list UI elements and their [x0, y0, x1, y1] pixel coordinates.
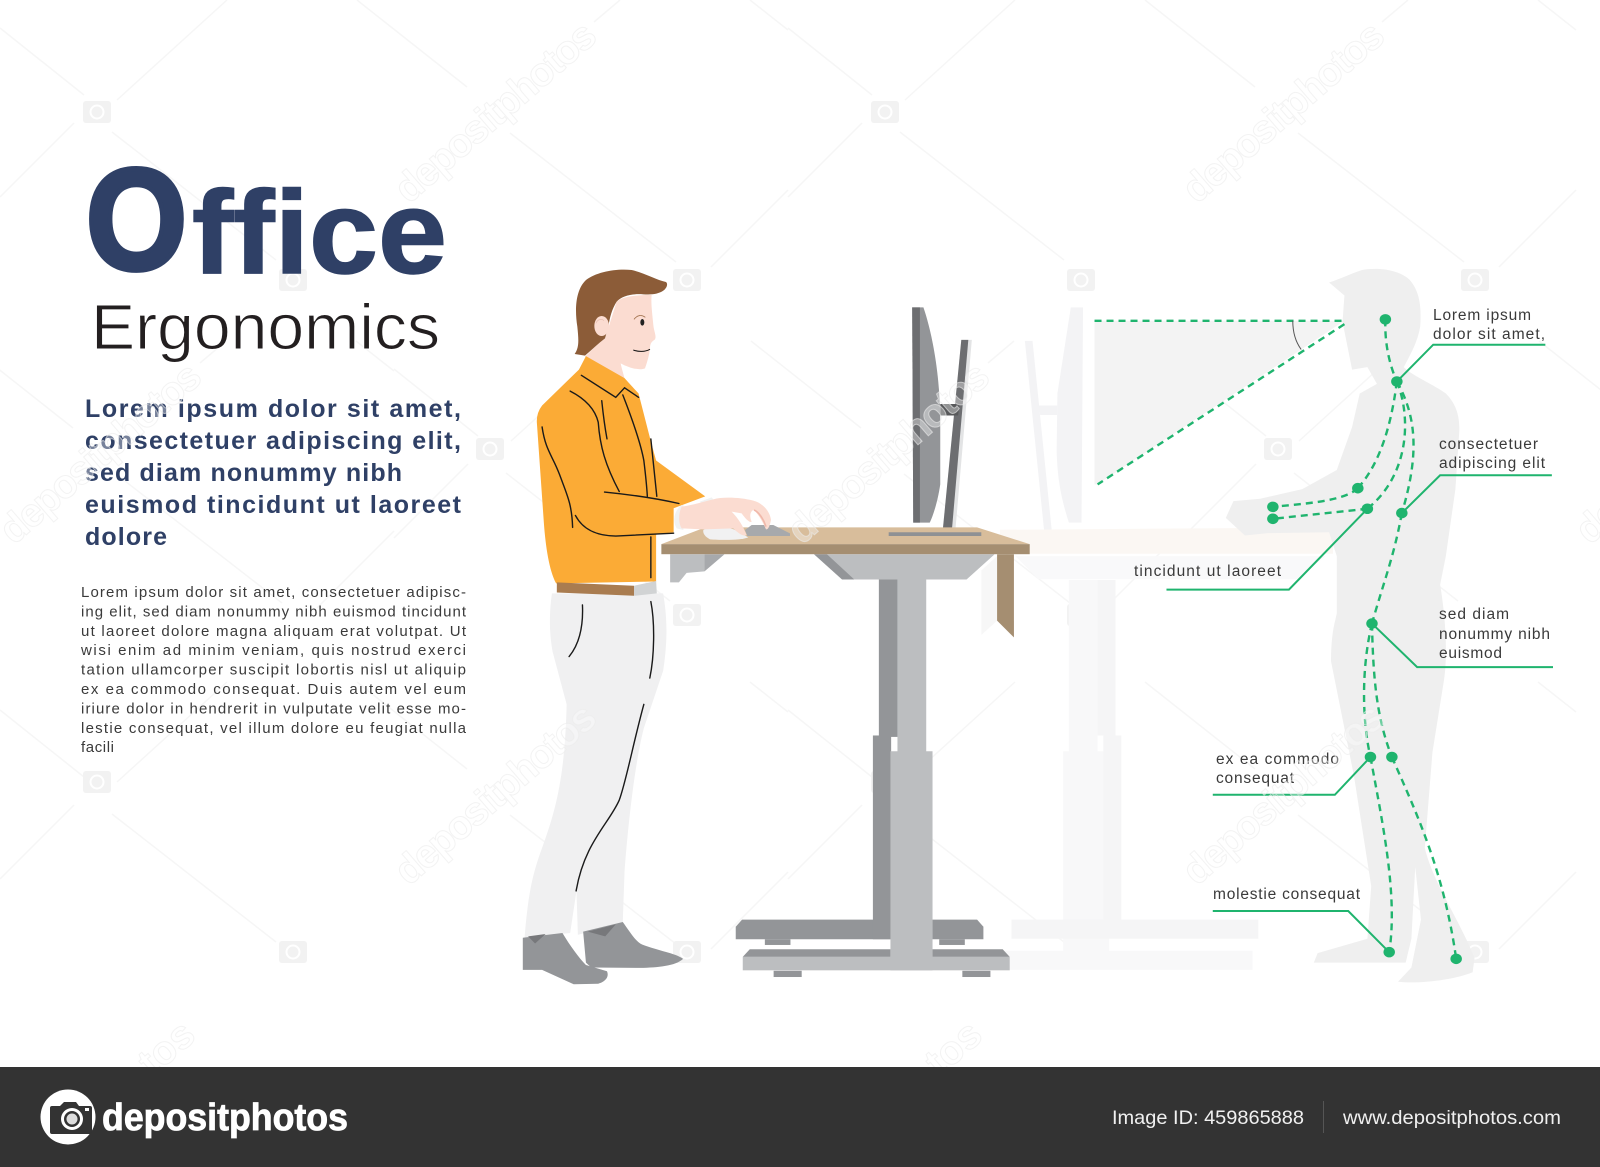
- depositphotos watermarks: tos: [916, 1012, 991, 1084]
- body paragraph: wisi enim ad minim veniam, quis nostrud exerci: [80, 642, 466, 659]
- title: Office: O: [86, 139, 187, 300]
- leader lines: [1166, 345, 1553, 952]
- diagram labels: consectetuer: [1439, 436, 1538, 453]
- body paragraph: tation ullamcorper suscipit lobortis nisl ut aliquip: [81, 662, 466, 679]
- standing desk: [661, 307, 1030, 977]
- orange shirt: [537, 356, 705, 596]
- monitors: [912, 307, 972, 531]
- subheading text block: Lorem ipsum dolor sit amet,: [85, 395, 461, 423]
- icon: camera logo: [40, 1090, 96, 1144]
- depositphotos watermarks: depositphotos: [779, 354, 998, 552]
- body paragraph: ex ea commodo consequat. Duis autem vel eum: [81, 681, 466, 698]
- body paragraph: iriure dolor in hendrerit in vulputate velit esse mo-: [81, 700, 466, 717]
- diagram labels: Lorem ipsum: [1433, 307, 1531, 324]
- under-desk brackets: [670, 554, 997, 635]
- subheading text block: [85, 395, 462, 551]
- image id: Image ID: 459865888: [1112, 1107, 1304, 1129]
- subheading text block: sed diam nonummy nibh: [85, 459, 402, 487]
- desk column: [873, 579, 933, 970]
- depositphotos watermarks: tos: [129, 1012, 204, 1084]
- body paragraph: ing elit, sed diam nonummy nibh euismod tincidunt: [81, 603, 467, 620]
- ghost monitor: [1025, 307, 1083, 530]
- title: Office: ffice: [192, 167, 447, 299]
- body paragraph: ut laoreet dolore magna aliquam erat volutpat. Ut: [81, 623, 467, 640]
- subheading text block: consectetuer adipiscing elit,: [85, 427, 461, 455]
- diagram labels: adipiscing elit: [1439, 455, 1546, 472]
- depositphotos watermarks: depositphotos: [1174, 695, 1393, 893]
- desk base: [736, 920, 1010, 977]
- title: Office: [86, 139, 447, 300]
- body paragraph: [80, 584, 467, 756]
- viewing angle wedge: [1095, 321, 1344, 484]
- silhouette figure: [1226, 269, 1475, 982]
- body paragraph: lestie consequat, vel illum dolore eu feugiat nulla: [81, 720, 467, 737]
- diagram labels: sed diam: [1439, 606, 1509, 623]
- subheading text block: dolore: [85, 523, 167, 551]
- watermark camera icons: [83, 101, 1489, 963]
- diagram labels: dolor sit amet,: [1433, 326, 1545, 343]
- body paragraph: Lorem ipsum dolor sit amet, consectetuer adipisc-: [81, 584, 466, 601]
- joint dots: [1267, 314, 1462, 964]
- desk top: [661, 527, 1030, 637]
- sight lines: [1095, 321, 1346, 484]
- head: [575, 270, 667, 380]
- diagram labels: nonummy nibh: [1439, 626, 1550, 643]
- diagram labels: ex ea commodo: [1216, 751, 1339, 768]
- logo wordmark: depositphotos: [102, 1097, 348, 1139]
- body paragraph: facili: [81, 739, 114, 756]
- diagram labels: consequat: [1216, 770, 1295, 787]
- depositphotos watermarks: depositphotos: [1174, 13, 1393, 211]
- depositphotos watermarks: depositphotos: [386, 695, 605, 893]
- subheading text block: euismod tincidunt ut laoreet: [85, 491, 462, 519]
- diagram labels: tincidunt ut laoreet: [1134, 563, 1282, 580]
- posture dashed lines: [1273, 319, 1456, 959]
- diagram labels: [1134, 307, 1550, 903]
- trousers and shoes: [523, 593, 683, 984]
- website url: www.depositphotos.com: [1342, 1107, 1561, 1129]
- diagram labels: euismod: [1439, 645, 1502, 662]
- ghost desk and monitor with posture diagram: [1000, 269, 1553, 982]
- hand, mouse and keyboard: [674, 497, 790, 540]
- title: Ergonomics: Ergonomics: [91, 291, 440, 363]
- footer divider: [1323, 1101, 1324, 1133]
- ghost desk: [1000, 527, 1333, 970]
- depositphotos watermarks: depositphotos: [386, 13, 605, 211]
- belt: [557, 581, 657, 596]
- diagram labels: molestie consequat: [1213, 886, 1361, 903]
- footer bar: [0, 1067, 1600, 1167]
- man standing at desk: [523, 270, 790, 984]
